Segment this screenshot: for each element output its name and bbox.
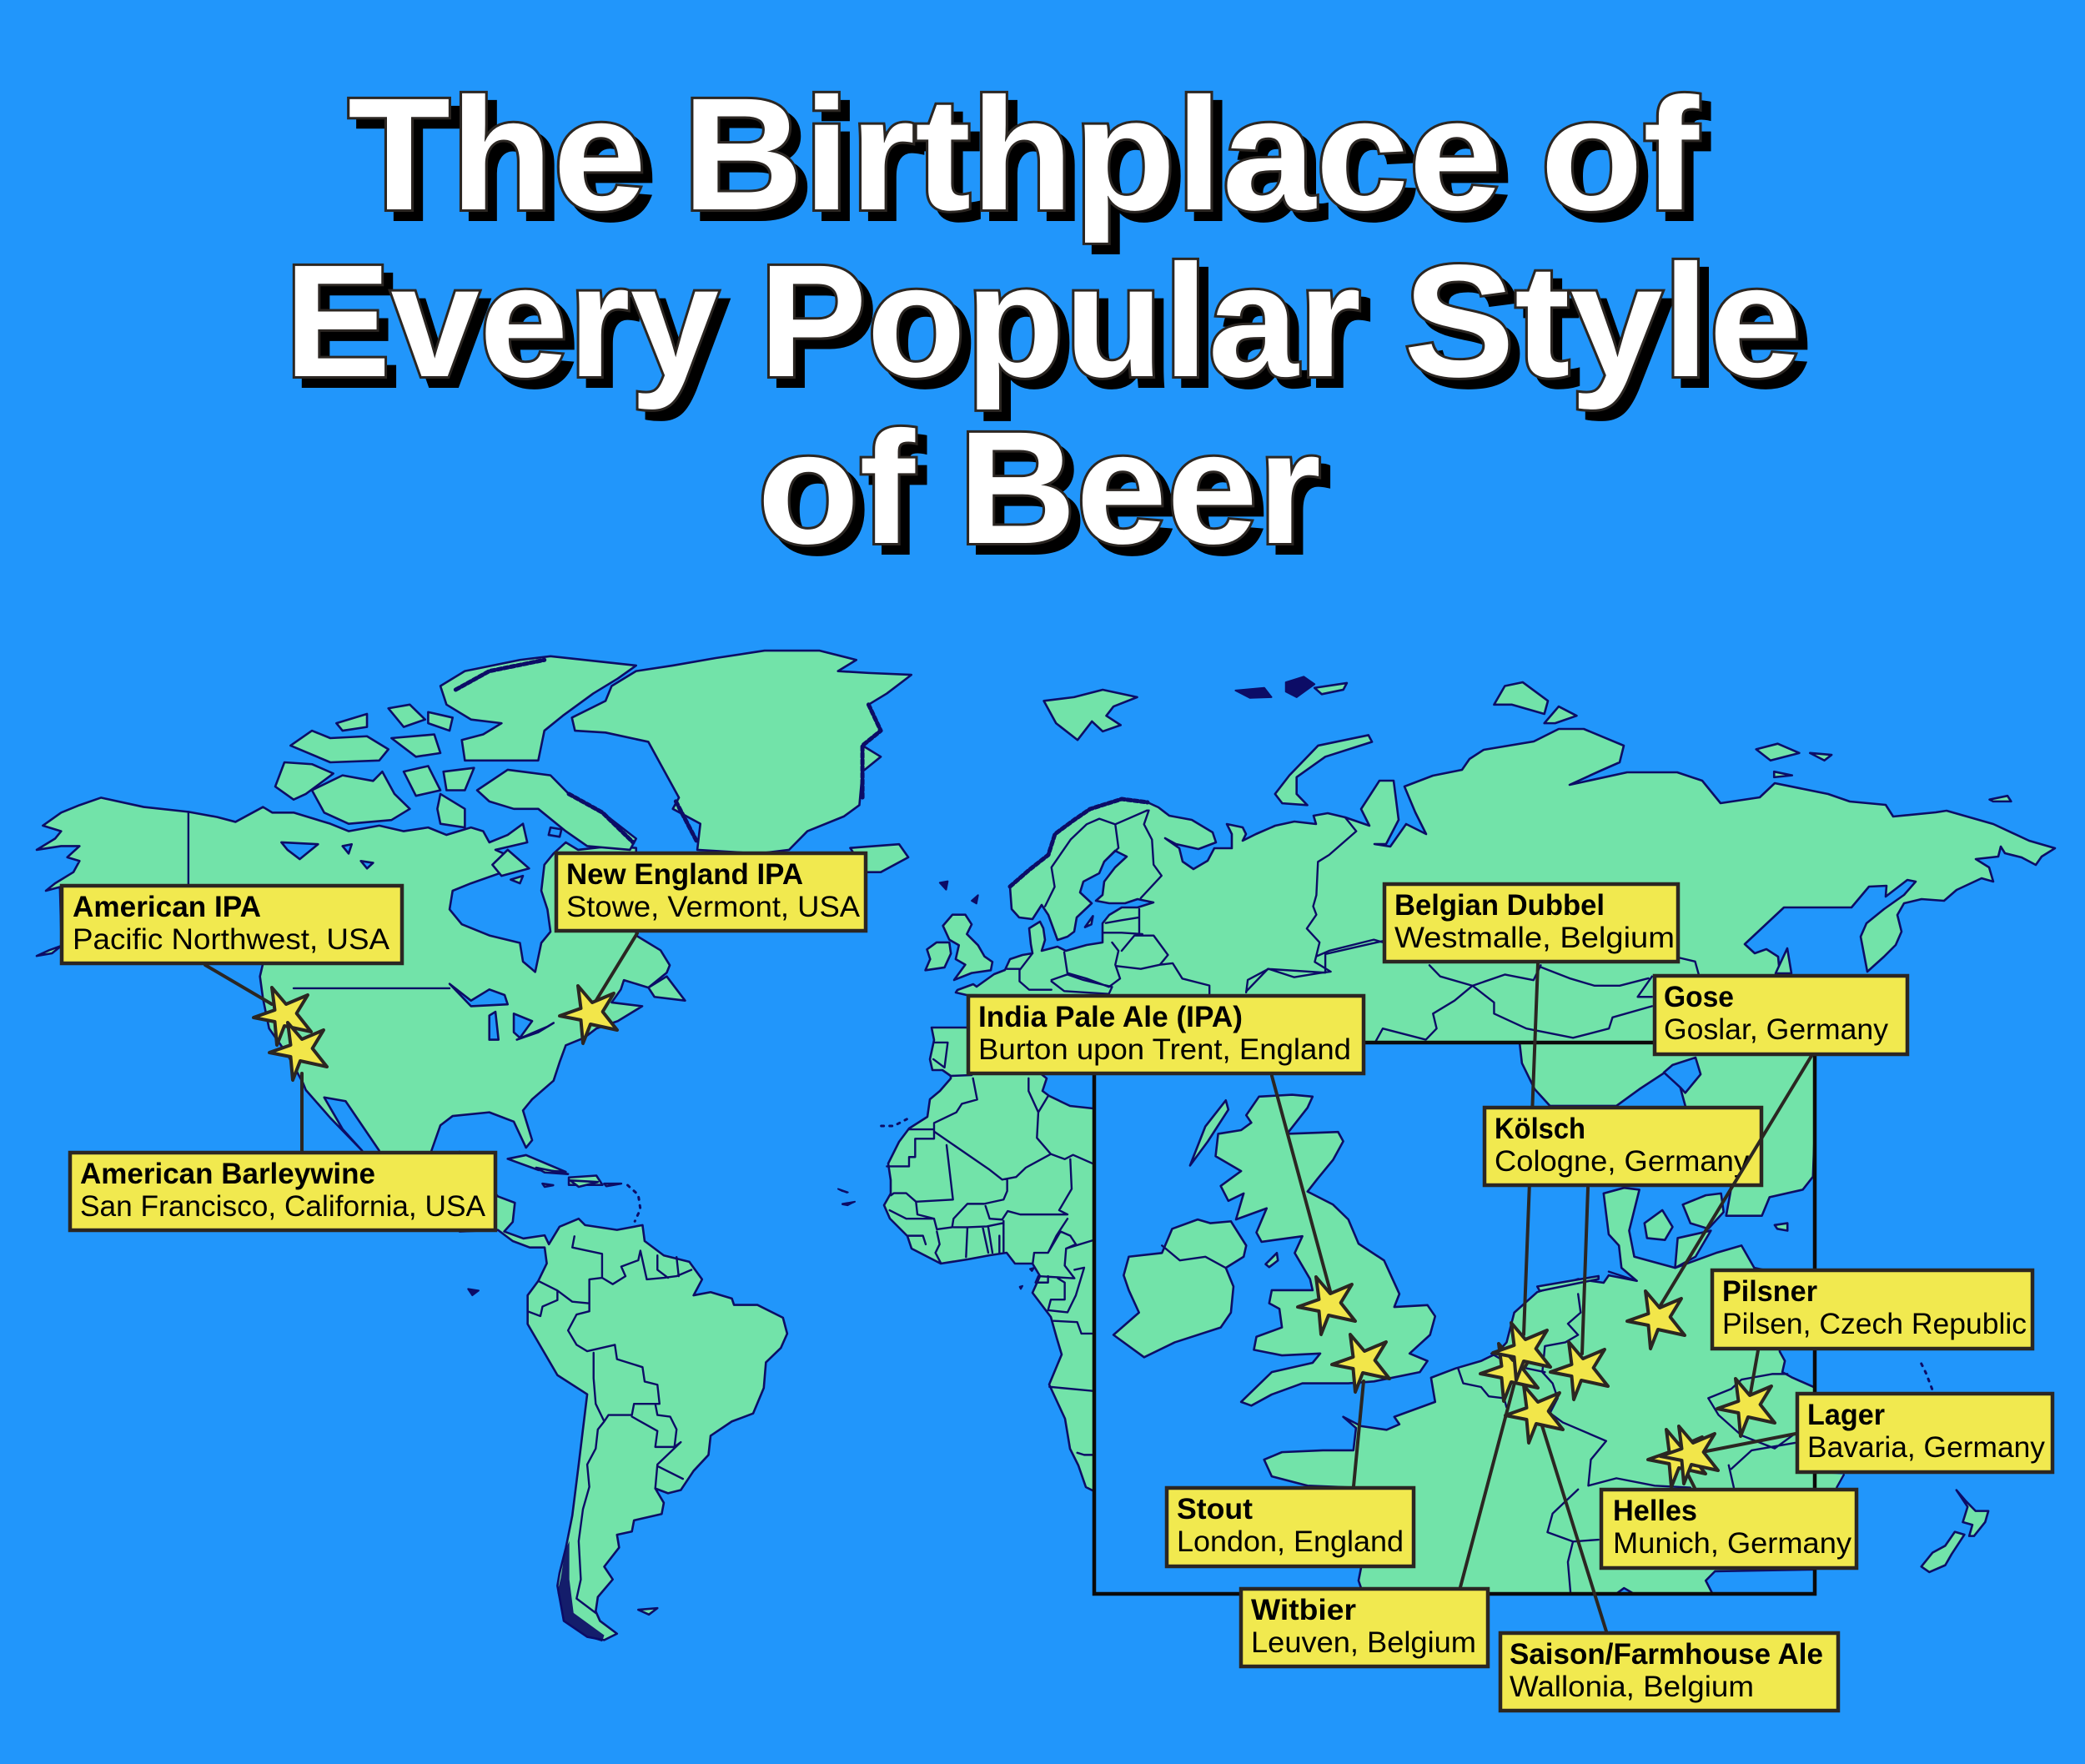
title shadow: Beer (967, 407, 1330, 586)
title shadow: of (1550, 73, 1709, 253)
label: Kölsch (1485, 1108, 1761, 1185)
title shadow: Birthplace (691, 73, 1511, 253)
label: Lager: Bavaria, Germany (1807, 1431, 2045, 1464)
title shadow: The (357, 73, 656, 253)
label: Helles: Munich, Germany (1613, 1527, 1852, 1560)
inset borders (1162, 1245, 1795, 1592)
label: American IPA (62, 886, 402, 963)
title foreground: Popular (759, 231, 1361, 410)
label: American Barleywine: San Francisco, California, USA (80, 1190, 486, 1223)
label: India Pale Ale (968, 996, 1364, 1073)
title foreground: of (1540, 64, 1700, 244)
ireland small (926, 942, 951, 970)
label: Belgian Dubbel: Belgian Dubbel (1394, 889, 1605, 922)
label: Stout: Stout (1177, 1493, 1253, 1525)
title foreground: Style (1404, 231, 1801, 410)
world map (37, 651, 2055, 1641)
title foreground: The (348, 64, 646, 244)
title (284, 64, 1811, 586)
great britain (1216, 1095, 1435, 1405)
arctic and greenland coast detail (455, 660, 881, 842)
africa borders (838, 1078, 1095, 1455)
label: New England IPA (556, 853, 866, 931)
label: Witbier: Leuven, Belgium (1251, 1626, 1476, 1659)
small north atlantic islands (940, 882, 947, 890)
label: Helles: Helles (1613, 1495, 1697, 1527)
label: Pilsner (1712, 1270, 2032, 1349)
inset frame (1094, 1043, 1815, 1594)
arctic islands (1044, 676, 2011, 1042)
label: Gose: Goslar, Germany (1664, 1013, 1888, 1046)
label: Saison/Farmhouse Ale: Saison/Farmhouse Ale (1510, 1638, 1823, 1671)
african islands (838, 1189, 848, 1193)
south america borders (528, 1236, 691, 1613)
europe detail (926, 811, 1384, 1068)
north america borders (188, 812, 450, 988)
title foreground (284, 64, 1801, 577)
stars (254, 986, 1775, 1487)
label: Stout: London, England (1177, 1525, 1404, 1558)
title shadow: Style (1413, 240, 1811, 420)
scandinavia (1520, 1041, 1818, 1216)
title foreground: Beer (958, 398, 1321, 577)
sakhalin (1776, 948, 1791, 973)
eurasia (956, 729, 2055, 1043)
label: Lager (1797, 1394, 2052, 1472)
isle of man (1266, 1253, 1278, 1267)
label: American IPA: Pacific Northwest, USA (73, 923, 390, 956)
norway coast detail (1010, 799, 1148, 887)
north america (37, 651, 912, 1193)
inset land (1113, 1041, 1818, 1596)
title shadow: of (766, 407, 925, 586)
label: Gose (1655, 976, 1907, 1054)
great britain small (943, 915, 992, 980)
label: Witbier (1241, 1589, 1488, 1666)
label: American Barleywine: American Barleywine (80, 1158, 375, 1190)
label: Saison/Farmhouse Ale: Wallonia, Belgium (1510, 1671, 1754, 1703)
label: Kölsch: Cologne, Germany (1495, 1145, 1750, 1178)
label: New England IPA: New England IPA (566, 858, 803, 891)
label: Pilsner: Pilsner (1722, 1275, 1817, 1308)
inset map: western europe (1094, 1041, 1818, 1596)
title shadow (294, 73, 1811, 586)
label: Lager: Lager (1807, 1399, 1885, 1431)
africa (838, 1072, 1101, 1491)
asia borders (1246, 941, 1699, 1042)
label: Stout (1167, 1488, 1414, 1566)
label: Belgian Dubbel: Westmalle, Belgium (1394, 922, 1675, 954)
europe borders (1007, 811, 1384, 994)
south america (460, 1152, 853, 1641)
ireland (1113, 1219, 1246, 1357)
label: Pilsner: Pilsen, Czech Republic (1722, 1308, 2027, 1340)
label: New England IPA: Stowe, Vermont, USA (566, 891, 861, 923)
title foreground: Birthplace (682, 64, 1502, 244)
label: Helles (1601, 1490, 1856, 1568)
label: Kölsch: Kölsch (1495, 1113, 1585, 1145)
iberia (930, 1028, 972, 1076)
caribbean and atlantic islands (570, 1180, 598, 1187)
title foreground: Every (284, 231, 719, 410)
title foreground: of (757, 398, 916, 577)
label: American Barleywine (70, 1153, 495, 1230)
label: India Pale Ale: India Pale Ale (IPA) (978, 1001, 1243, 1033)
hebrides (1190, 1100, 1228, 1165)
leader lines (205, 933, 1796, 1631)
new zealand and pacific (1815, 1364, 1988, 1572)
label: Witbier: Witbier (1251, 1594, 1356, 1626)
label: India Pale Ale: Burton upon Trent, England (978, 1033, 1351, 1066)
label: Gose: Gose (1664, 981, 1734, 1013)
leader line: Gose (1660, 1056, 1811, 1305)
label: American IPA: American IPA (73, 891, 261, 923)
label: Saison/Farmhouse Ale (1500, 1633, 1838, 1711)
title shadow: Popular (768, 240, 1370, 420)
title shadow: Every (294, 240, 728, 420)
continental europe (1264, 1188, 1818, 1596)
chilean fjords (557, 1541, 604, 1641)
danish islands (1645, 1210, 1672, 1240)
australia sliver (1815, 1472, 1844, 1489)
label: Belgian Dubbel (1384, 884, 1678, 962)
